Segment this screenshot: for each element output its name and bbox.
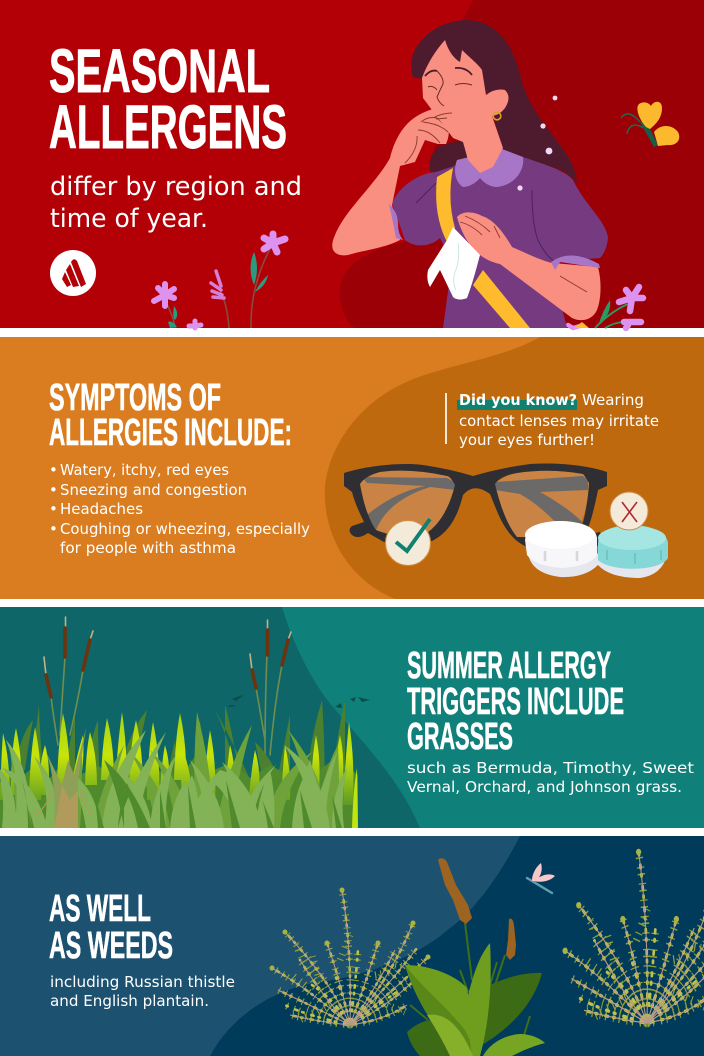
icon: butterfly [621,102,679,147]
subtitle [50,172,302,234]
title [49,37,287,161]
panel: seasonal allergens [0,0,704,328]
dress [392,157,608,328]
heading: summer allergy triggers: GRASSES [407,716,513,758]
illustration: grass [0,700,358,828]
heading: symptoms [49,377,292,454]
symptoms list: Headaches [60,500,143,518]
heading: as well as weeds: AS WEEDS [49,925,173,967]
symptoms list: for people with asthma [60,539,236,557]
pollen [517,96,557,191]
illustration: reed clump [36,728,90,828]
tissue [427,227,480,300]
illustration: small leaves drifting [228,695,370,708]
illustration: thistle bush left [272,890,428,1025]
strap [436,168,589,328]
subtitle: differ by region and [50,172,302,202]
arm with hand at nose [332,107,453,255]
earring [493,112,501,120]
panel: weeds [0,836,704,1056]
collar [455,149,523,187]
illustration: glasses [344,463,607,548]
icon: check mark [386,519,430,566]
heading: summer allergy triggers [407,645,624,758]
face and neck [422,40,508,173]
title: SEASONAL [49,37,270,105]
illustration: wildflowers left [154,234,285,328]
weeds description: and English plantain. [50,992,209,1010]
symptoms list: • [49,481,58,499]
panel: symptoms [0,337,704,599]
callout: did you know: Did you know? [459,391,577,409]
arm with hand at chest [457,212,601,320]
illustration: thistle bush right [565,852,704,1023]
symptoms list: Sneezing and congestion [60,481,247,499]
icon: x mark [610,492,648,530]
heading: as well as weeds: AS WELL [49,888,151,930]
symptoms list [49,461,310,557]
heading: as well as weeds [49,888,173,967]
illustration: cattails [44,617,291,760]
icon: logo [50,250,96,296]
grasses description: such as Bermuda, Timothy, Sweet [407,759,694,777]
grasses description [407,759,694,796]
callout: did you know [445,391,659,449]
subtitle: time of year. [50,204,208,234]
symptoms list: • [49,520,58,538]
symptoms list: • [49,461,58,479]
callout: did you know: contact lenses may irritate [459,412,659,430]
icon: dragonfly [527,863,555,893]
illustration: wildflowers right [568,287,643,328]
face details [425,68,472,76]
callout: did you know: your eyes further! [459,431,595,449]
callout: did you know: Wearing [582,391,644,409]
heading: symptoms: SYMPTOMS OF [49,377,221,419]
weeds description [50,973,235,1010]
illustration: woman sneezing [332,20,608,328]
symptoms list: Coughing or wheezing, especially [60,520,310,538]
heading: symptoms: ALLERGIES INCLUDE: [49,412,292,454]
weeds description: including Russian thistle [50,973,235,991]
symptoms list: • [49,500,58,518]
panel: summer grasses [0,607,704,828]
illustration: plantain [405,858,545,1056]
grasses description: Vernal, Orchard, and Johnson grass. [407,778,682,796]
title: ALLERGENS [49,93,287,161]
illustration: contact lens case [525,521,668,578]
symptoms list: Watery, itchy, red eyes [60,461,229,479]
